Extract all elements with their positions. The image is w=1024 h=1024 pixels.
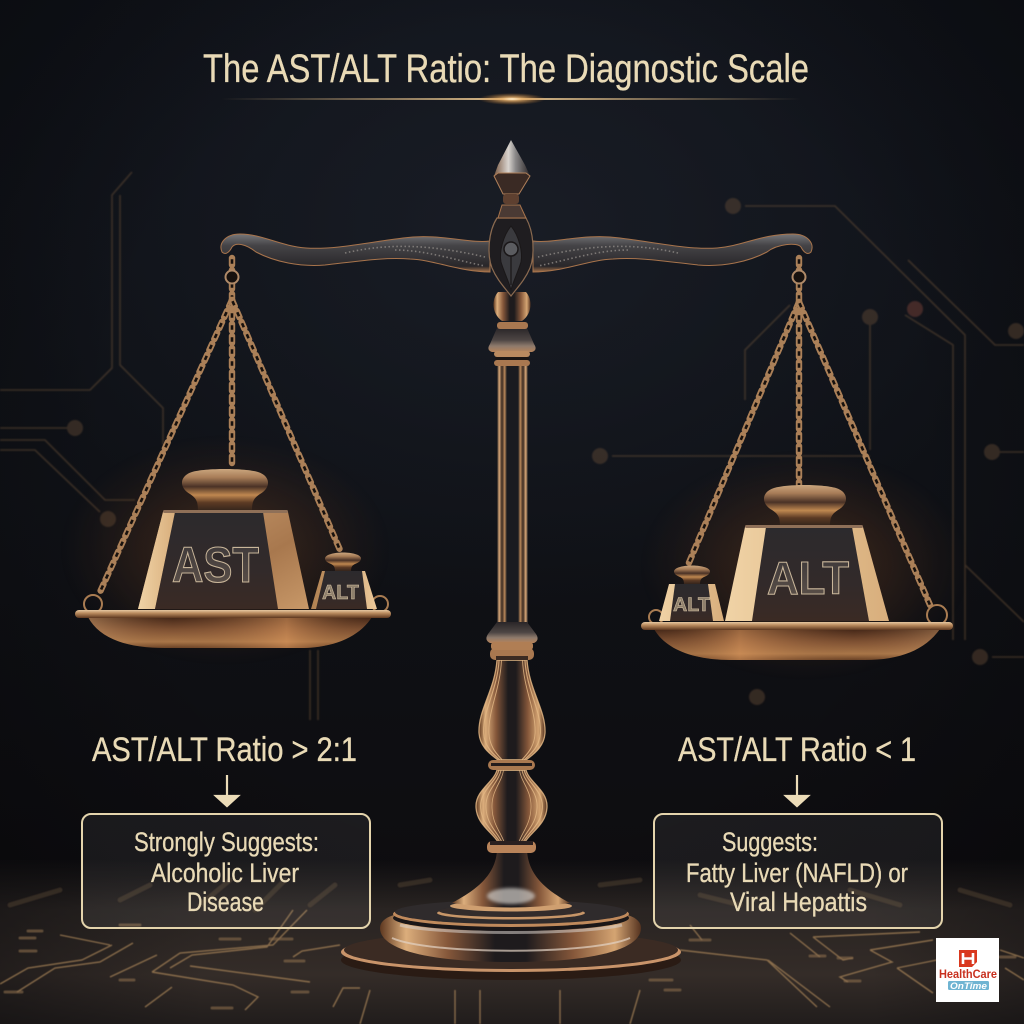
finial	[494, 140, 530, 218]
ALT weight	[725, 485, 889, 621]
logo wordmark: HealthCare	[939, 969, 997, 981]
left ratio label: AST/ALT Ratio > 2:1	[92, 731, 357, 769]
foot flare	[452, 848, 570, 908]
left box text: Alcoholic Liver	[151, 858, 299, 888]
left box text	[134, 827, 319, 917]
left pan	[75, 610, 391, 648]
right box text: Viral Hepattis	[730, 887, 867, 917]
title underline with glow	[220, 93, 802, 105]
ALT label, large: ALT	[767, 552, 849, 604]
left box text: Strongly Suggests:	[134, 827, 319, 857]
right box text: Suggests:	[722, 827, 818, 857]
beam left arm	[221, 234, 490, 272]
AST weight	[138, 469, 309, 609]
left conclusion box	[82, 814, 370, 928]
logo icon	[959, 950, 977, 967]
small ALT label, right: ALT	[673, 595, 710, 616]
scale beam	[221, 140, 812, 296]
upper shaft bulge	[488, 322, 536, 366]
centre pivot plate	[489, 218, 533, 296]
upper base tier	[393, 900, 629, 931]
upper fluted vase	[479, 660, 545, 760]
logo tagline: OnTime	[950, 981, 988, 992]
warm glow	[640, 450, 970, 680]
thick base ring	[380, 912, 641, 962]
right box text	[686, 827, 908, 917]
logo: HealthCare OnTime	[936, 938, 999, 1002]
scale stand	[341, 292, 681, 980]
shaft	[497, 362, 528, 632]
beam engraving	[345, 246, 678, 266]
lower fluted vase	[476, 770, 547, 842]
floor circuit traces	[0, 880, 1024, 1024]
title: The AST/ALT Ratio: The Diagnostic Scale	[203, 47, 809, 91]
left chains	[84, 258, 388, 613]
left box text: Disease	[187, 887, 264, 917]
right down arrow	[786, 775, 808, 806]
right chains	[649, 258, 947, 625]
AST label: AST	[172, 537, 259, 593]
base disc	[341, 931, 681, 980]
right box text: Fatty Liver (NAFLD) or	[686, 858, 908, 888]
right pan assembly	[640, 258, 970, 680]
tulip neck	[493, 292, 531, 321]
right ratio label: AST/ALT Ratio < 1	[678, 731, 916, 769]
small ALT label, left: ALT	[322, 582, 359, 604]
collar rings	[487, 648, 536, 853]
right pan	[641, 622, 953, 660]
beam right arm	[533, 234, 812, 272]
warm glow	[60, 435, 390, 665]
left down arrow	[216, 775, 238, 806]
foot flare highlight	[487, 888, 535, 904]
small ALT weight, right pan	[659, 566, 724, 621]
small ALT weight, left pan	[311, 552, 377, 609]
right conclusion box	[654, 814, 942, 928]
lower shaft bulge	[486, 622, 538, 650]
background circuit traces	[0, 172, 1024, 720]
left pan assembly	[60, 258, 391, 665]
